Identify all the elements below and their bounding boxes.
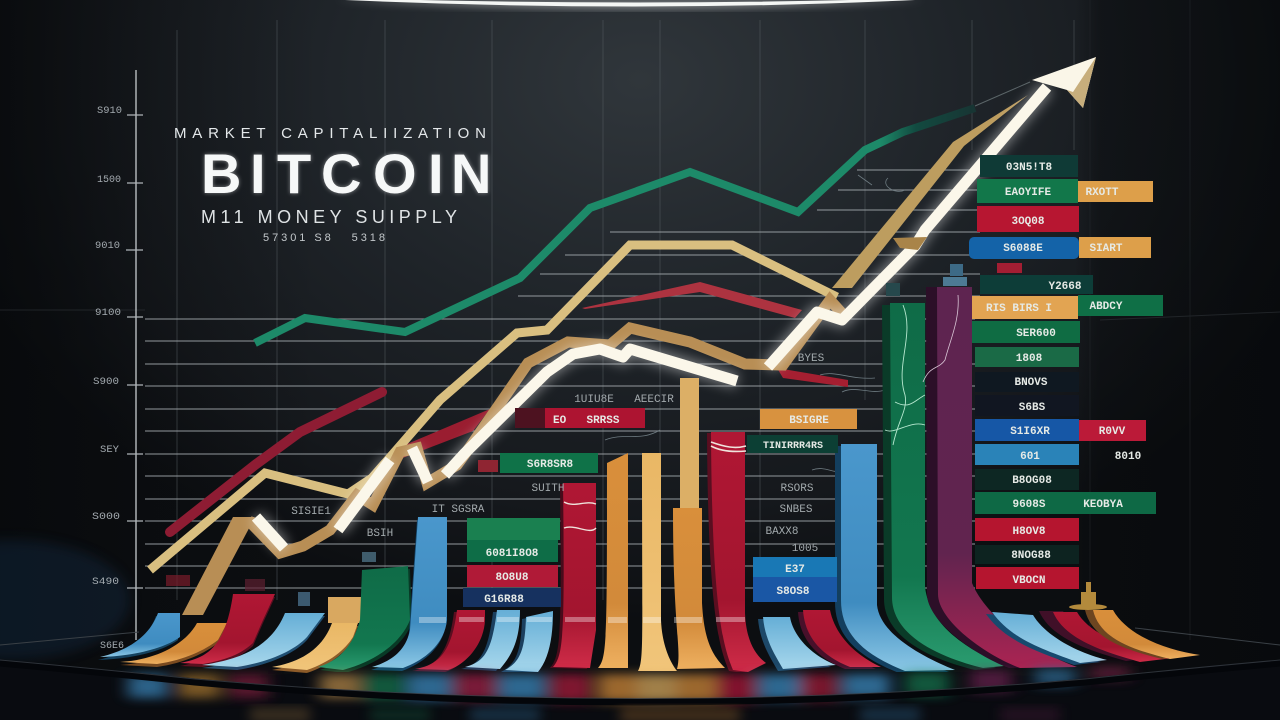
label stack: right column: 9608S [1012,499,1046,511]
labels: central group: SUITH [531,483,565,495]
y axis: S490 [92,577,119,588]
labels: central group: 1UIU8E [574,394,614,406]
label stack: right column: RXOTT [1085,187,1119,199]
labels: left stack: 6081I8O8 [486,548,539,560]
labels: central group: BAXX8 [765,526,799,538]
label stack: right column: SIART [1089,243,1123,255]
labels: central group: 1005 [792,543,818,555]
bar: orange [598,453,628,668]
label stack: right column: 03N5!T8 [1006,162,1052,174]
labels: left stack [166,518,561,607]
label stack: right column: Y2668 [1048,281,1082,293]
label stack: right column: BNOVS [1014,377,1048,389]
label stack: right column: VBOCN [1012,575,1046,587]
title block: 57301 S8 5318 [263,232,385,244]
bar: blue tall [371,517,447,671]
bar foot: light blue [501,611,553,674]
label stack: right column: SER600 [1016,328,1056,340]
floor with coloured reflections [0,628,1280,720]
chalk scribbles on grid [605,175,905,471]
bar: orange wide [673,508,725,669]
y axis: S6E6 [100,641,124,652]
glints on bars [419,617,745,623]
line: tan lower [182,300,848,615]
bar: red block [180,594,275,667]
bar foot: blue [98,613,180,660]
labels: central group: SISIE1 [291,506,331,518]
bar: blue tall [835,444,955,673]
y axis: 9010 [95,241,120,252]
grid lines [145,170,980,588]
labels: central group: BSIGRE [789,415,829,427]
labels: central group: TINIRRR4RS [763,441,823,452]
top ceiling light [335,0,925,9]
bar: purple tall [923,287,1077,668]
bar: tan block [272,597,363,673]
label stack: right column: KEOBYA [1083,499,1123,511]
labels: central group: IT SGSRA [432,504,485,516]
label stack: right column: S1I6XR [1010,426,1050,438]
label stack: right column: S6BS [1019,402,1046,414]
y axis: 9100 [95,308,121,319]
label stack: right column: RIS BIRS I [986,303,1052,315]
column: tan thin [680,378,699,509]
labels: central group: E37 [785,564,805,576]
bar foot: orange [1085,610,1200,659]
label stack: right column: 8010 [1115,451,1141,463]
labels: central group [291,353,857,602]
labels: central group: BSIH [367,528,393,540]
bar foot: light blue [202,613,325,670]
y axis [92,70,143,652]
label stack: right column: R0VV [1099,426,1126,438]
label stack: right column [969,155,1163,589]
labels: central group: RSORS [780,483,814,495]
labels: central group: SNBES [779,504,813,516]
stage front edge [0,663,1280,702]
arrow: bright rising arrow [256,57,1096,548]
label stack: right column: H8OV8 [1012,526,1046,538]
label stack: right column: ABDCY [1089,301,1123,313]
bar foot: red [1039,611,1173,662]
bar: green tall [882,303,1004,670]
labels: central group: BYES [798,353,825,365]
title block: M11 MONEY SUIPPLY [201,207,457,227]
bar foot: red [798,610,881,669]
labels: central group: S6R8SR8 [527,459,573,471]
label stack: right column: 3OQ08 [1011,216,1045,228]
bar: tan [638,453,677,671]
bar: green block [318,566,412,673]
label stack: right column: 1808 [1016,353,1043,365]
labels: central group: EO [553,415,567,427]
y axis: S000 [92,512,120,523]
title block: BITCOIN [201,142,491,205]
y axis: S900 [93,377,119,388]
title block [174,125,491,244]
line: green [255,82,1030,343]
y axis: SEY [100,445,119,456]
y axis: S910 [97,106,122,117]
title block: BITCOIN [201,142,491,205]
bars: left group [98,517,553,674]
labels: central group: S8OS8 [776,586,810,598]
label stack: right column: 601 [1020,451,1040,463]
title block: MARKET CAPITALIIZATION [174,125,486,142]
bar: red tall [707,432,766,673]
y axis: 1500 [97,175,121,186]
line: red [170,282,848,532]
labels: left stack: G16R88 [484,594,524,606]
icon: small tags above bars [298,264,967,606]
bar foot: red [412,610,485,672]
bar foot: light blue [461,610,520,671]
label stack: right column: S6088E [1003,243,1043,255]
label stack: right column: EAOYIFE [1005,187,1051,199]
labels: central group: SRRSS [586,415,620,427]
label stack: right column: B8OG08 [1012,475,1052,487]
line: tan upper [150,95,1028,570]
labels: left stack: 8O8U8 [495,572,529,584]
icon: gold trophy on orange bar [1069,582,1107,610]
bar foot: light blue [758,617,836,671]
bars: right tall group [835,287,1200,673]
bar: red [550,483,596,669]
bar foot: light blue [986,612,1107,665]
labels: central group: AEECIR [634,394,674,406]
bars: central group [419,378,881,673]
label stack: right column: 8NOG88 [1011,550,1051,562]
bar foot: orange [120,623,227,667]
